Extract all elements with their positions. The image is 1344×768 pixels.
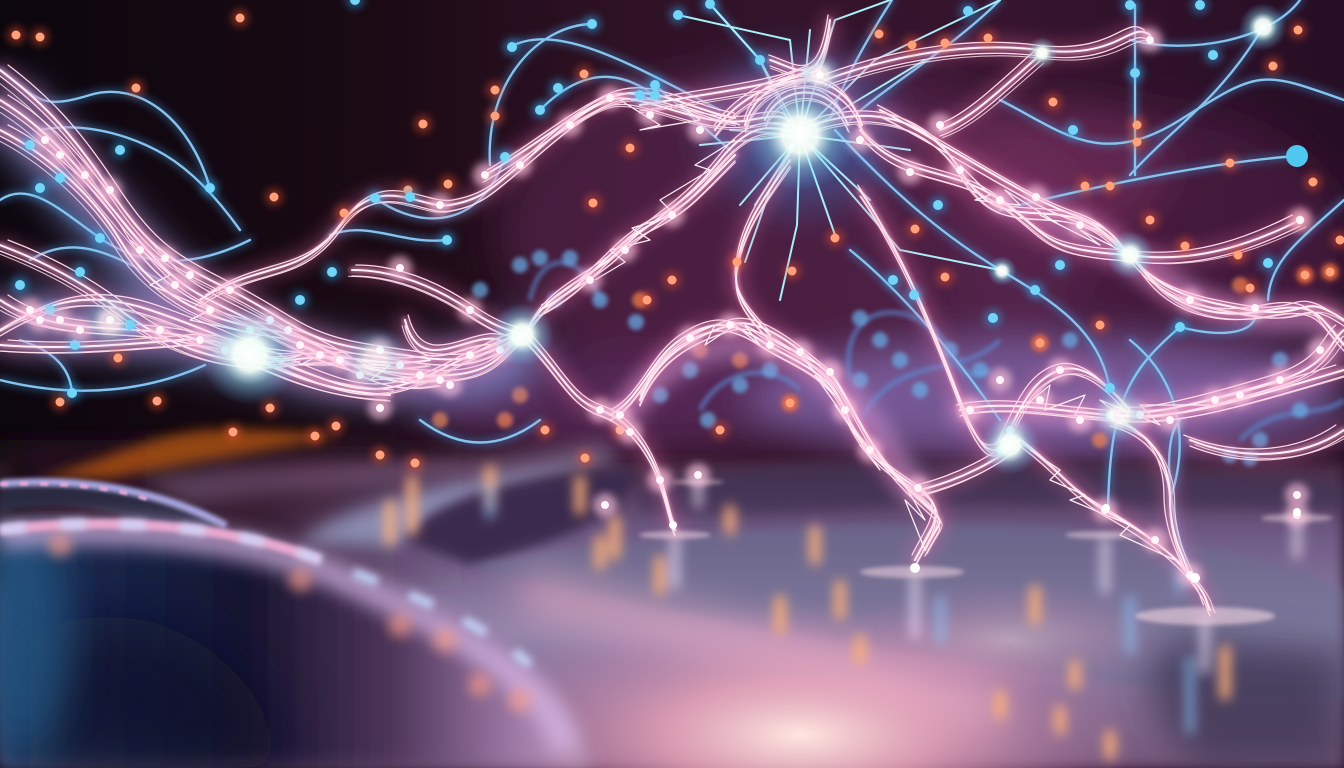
reflection: white pillars <box>675 480 1297 670</box>
cyan nodes: glow <box>20 0 1268 393</box>
blue filaments: lines <box>0 0 1344 575</box>
floor dark patch: curved shadow <box>405 470 640 565</box>
blue filaments: glow <box>0 0 1344 575</box>
hub: orange top node <box>1026 37 1058 69</box>
hub: cyan right node <box>1286 145 1308 167</box>
orange nodes: glow <box>16 18 1340 463</box>
pink strands: braid copy one <box>0 26 1344 616</box>
pad: centre <box>860 566 964 578</box>
pink strands: core lines <box>0 20 1344 610</box>
reflection: warm streaks <box>390 470 1225 755</box>
cable highlight: orange blooms <box>60 545 520 700</box>
pad: lower right <box>1135 607 1275 625</box>
hub: left band bloom one <box>80 292 140 352</box>
right band glow <box>620 200 1344 500</box>
hub: top cluster <box>796 51 844 99</box>
pink strands: braid copy three <box>0 29 1344 613</box>
reflection: blue streaks <box>490 490 1190 730</box>
cable shading: left blue edge <box>0 530 70 750</box>
floor dark patch: sweep <box>470 524 1344 700</box>
pink strands: braid copy two <box>8 15 1336 605</box>
pad: far mid <box>672 479 724 485</box>
pink strands: wide glow <box>0 20 1344 610</box>
orange nodes: core <box>16 18 1340 463</box>
floor dark patch: right shadow <box>1149 640 1344 768</box>
defocused orange dots <box>440 272 1330 440</box>
pad: right <box>1065 531 1141 539</box>
defocused blue dots <box>480 258 1300 458</box>
floor glow: pink hotspot <box>440 560 1160 768</box>
background glow behind network <box>410 55 1344 460</box>
foreground blurred cable: large dark form <box>0 524 590 768</box>
white nodes: glow <box>30 40 1320 575</box>
hub: mid junction <box>490 303 554 367</box>
cable highlight: lit dashes <box>0 524 530 665</box>
hub: right junction <box>1106 231 1154 279</box>
cable shading: lit rim <box>0 531 565 750</box>
cable shading: deep shadow <box>30 616 290 768</box>
floor: dark left falloff <box>0 440 1344 590</box>
floor dark patch: mid band <box>640 462 1344 515</box>
cyan nodes: core <box>20 0 1268 393</box>
pad: mid <box>639 531 711 539</box>
hub: top right star <box>1239 3 1287 51</box>
pad glow: star points <box>669 504 1301 583</box>
hub: cyan mid node <box>987 256 1017 286</box>
bright hubs <box>80 3 1308 475</box>
floor: reflective surface <box>0 440 1344 768</box>
floor reflections <box>390 470 1297 755</box>
hub: left bright cluster <box>200 305 300 405</box>
central burst rays <box>678 0 1000 300</box>
foreground blurred cable: upper strand <box>0 482 232 530</box>
cable highlight: pink band <box>0 524 320 560</box>
mesh detail lines <box>130 100 1210 560</box>
contact pads on floor <box>639 479 1333 625</box>
floor glow: band to hotspot <box>520 590 1000 710</box>
left band glow <box>0 100 530 375</box>
defocused wires <box>530 262 1344 440</box>
floor glow: distant <box>840 580 1180 700</box>
hub: right lower junction <box>980 415 1040 475</box>
hub: mid lower glow <box>1092 387 1148 443</box>
pad: far right <box>1261 514 1333 522</box>
defocused distant nodes <box>440 258 1344 458</box>
orange streak at horizon <box>40 429 340 478</box>
white nodes: core <box>30 40 1320 575</box>
floor glow: left shore <box>300 450 620 545</box>
floor band: faint distance strip <box>140 440 630 505</box>
signal nodes <box>16 0 1340 575</box>
pink strands: near glow <box>0 20 1344 610</box>
hub: left band bloom two <box>341 326 409 394</box>
hub: central burst <box>744 79 856 191</box>
